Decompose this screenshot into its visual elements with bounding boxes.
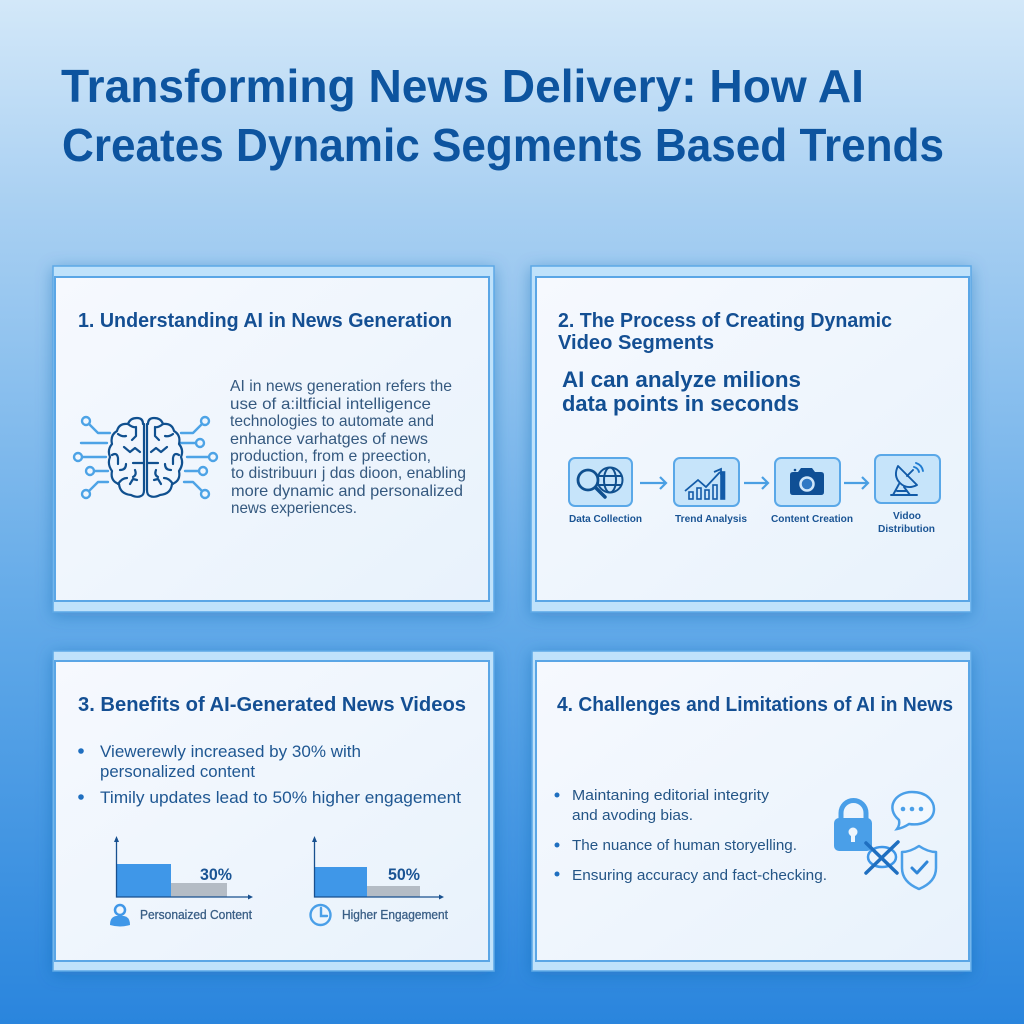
callout: data points: data points in seconds xyxy=(562,391,799,416)
bullet list: benefits: Viewerewly increased by 30% with xyxy=(100,742,361,761)
heading: section 2: 2. The Process of Creating Dynamic xyxy=(558,310,892,332)
bar chart: higher engagement xyxy=(312,836,444,900)
bar chart: personalized content: 30% xyxy=(200,866,232,884)
heading: section 2: Video Segments xyxy=(558,332,714,354)
bullet list: challenges: Ensuring accuracy and fact-checking. xyxy=(572,867,827,884)
icon: crossed eye xyxy=(866,842,898,873)
icon: clock xyxy=(310,905,330,925)
text block: AI definition: more dynamic and personalized xyxy=(231,483,463,500)
bullet list: benefits: personalized content xyxy=(100,762,255,781)
bullet list: benefits: Timily updates lead to 50% higher engagement xyxy=(100,788,461,807)
heading: section 3: 3. Benefits of AI-Generated News Videos xyxy=(78,694,466,716)
heading: section 2 xyxy=(558,310,892,354)
callout: data points: AI can analyze milions xyxy=(562,367,801,392)
step labels: Trend Analysis xyxy=(675,513,747,525)
step labels: Distribution xyxy=(878,523,935,535)
heading: section 4: 4. Challenges and Limitations of AI in News xyxy=(557,694,953,716)
text block: AI definition: news experiences. xyxy=(231,500,357,517)
bullet list: challenges: The nuance of human storyelling. xyxy=(572,837,797,854)
icon: brain with circuits xyxy=(74,417,217,498)
step labels: Content Creation xyxy=(771,513,853,525)
text block: AI definition: production, from e preection, xyxy=(230,448,431,465)
arrow xyxy=(744,477,768,489)
bar chart: personalized content xyxy=(114,836,253,900)
step labels: Data Collection xyxy=(569,513,642,525)
bullet list: challenges xyxy=(554,787,827,884)
panel: process xyxy=(531,266,971,612)
title xyxy=(61,60,944,171)
panel: challenges xyxy=(532,651,971,971)
arrow xyxy=(640,477,666,489)
text block: AI definition: AI in news generation refers the xyxy=(230,378,452,395)
step labels: Vidoo xyxy=(893,510,921,522)
icon: content creation xyxy=(775,458,840,506)
bar chart: higher engagement: 50% xyxy=(388,866,420,884)
text block: AI definition: technologies to automate and xyxy=(230,413,434,430)
text block: AI definition: to distribuurı j dɑs dioon, enabling xyxy=(231,465,466,482)
heading: section 1: 1. Understanding AI in News Generation xyxy=(78,310,452,332)
icon: trend analysis xyxy=(674,458,739,506)
icon: video distribution xyxy=(875,455,940,503)
panel: understanding AI xyxy=(53,266,494,612)
label: higher engagement: Higher Engagement xyxy=(342,908,448,922)
icon: speech bubble xyxy=(892,792,934,829)
bullet list: challenges: and avoding bias. xyxy=(572,807,693,824)
callout: data points xyxy=(562,367,801,416)
label: personalized content: Personaized Content xyxy=(140,908,252,922)
icon: padlock xyxy=(834,800,872,851)
text block: AI definition xyxy=(230,378,466,517)
bullet list: benefits xyxy=(78,742,461,807)
icon: person xyxy=(110,905,130,926)
arrow xyxy=(844,477,868,489)
text block: AI definition: use of a:iltficial intelligence xyxy=(230,396,431,413)
bullet list: challenges: Maintaning editorial integrity xyxy=(572,787,770,804)
icon: data collection xyxy=(569,458,632,506)
title: Transforming News Delivery: How AI xyxy=(61,60,864,112)
icon: shield with check xyxy=(902,846,936,889)
step labels xyxy=(569,510,935,535)
text block: AI definition: enhance varhatges of news xyxy=(230,431,428,448)
panel: benefits xyxy=(53,651,494,971)
title: Creates Dynamic Segments Based Trends xyxy=(62,119,944,171)
